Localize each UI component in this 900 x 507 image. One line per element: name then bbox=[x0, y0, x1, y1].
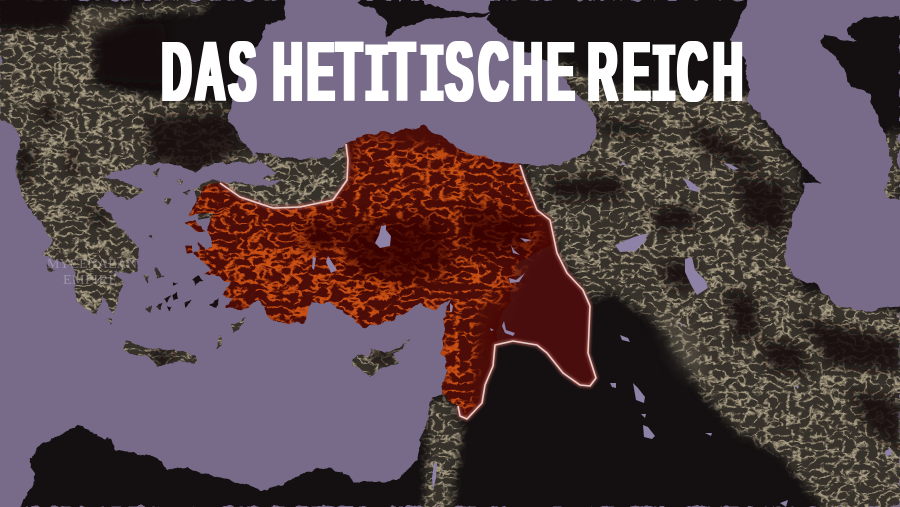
relief: darker interior bbox=[300, 205, 535, 285]
faint label: Mycenaean Empire: EMPIRE bbox=[63, 273, 117, 288]
faint label: Mycenaean Empire bbox=[47, 257, 137, 288]
Hittite empire territory bbox=[180, 120, 610, 425]
relief: eastern lowlands bbox=[498, 242, 542, 307]
empire border line bbox=[220, 144, 596, 419]
terrain: muted lowland plain bbox=[70, 8, 705, 385]
relief: bright southwest ridges bbox=[200, 240, 470, 415]
empire border glow bbox=[220, 144, 596, 419]
empire fill with relief bbox=[180, 120, 610, 425]
relief: orange ridges bbox=[180, 135, 540, 420]
title: DAS HETITISCHE REICH bbox=[162, 24, 742, 126]
faint label: Mycenaean Empire: MYCENAEAN bbox=[47, 257, 137, 272]
lakes and small water bodies bbox=[432, 162, 892, 507]
empire lakes bbox=[312, 225, 532, 336]
